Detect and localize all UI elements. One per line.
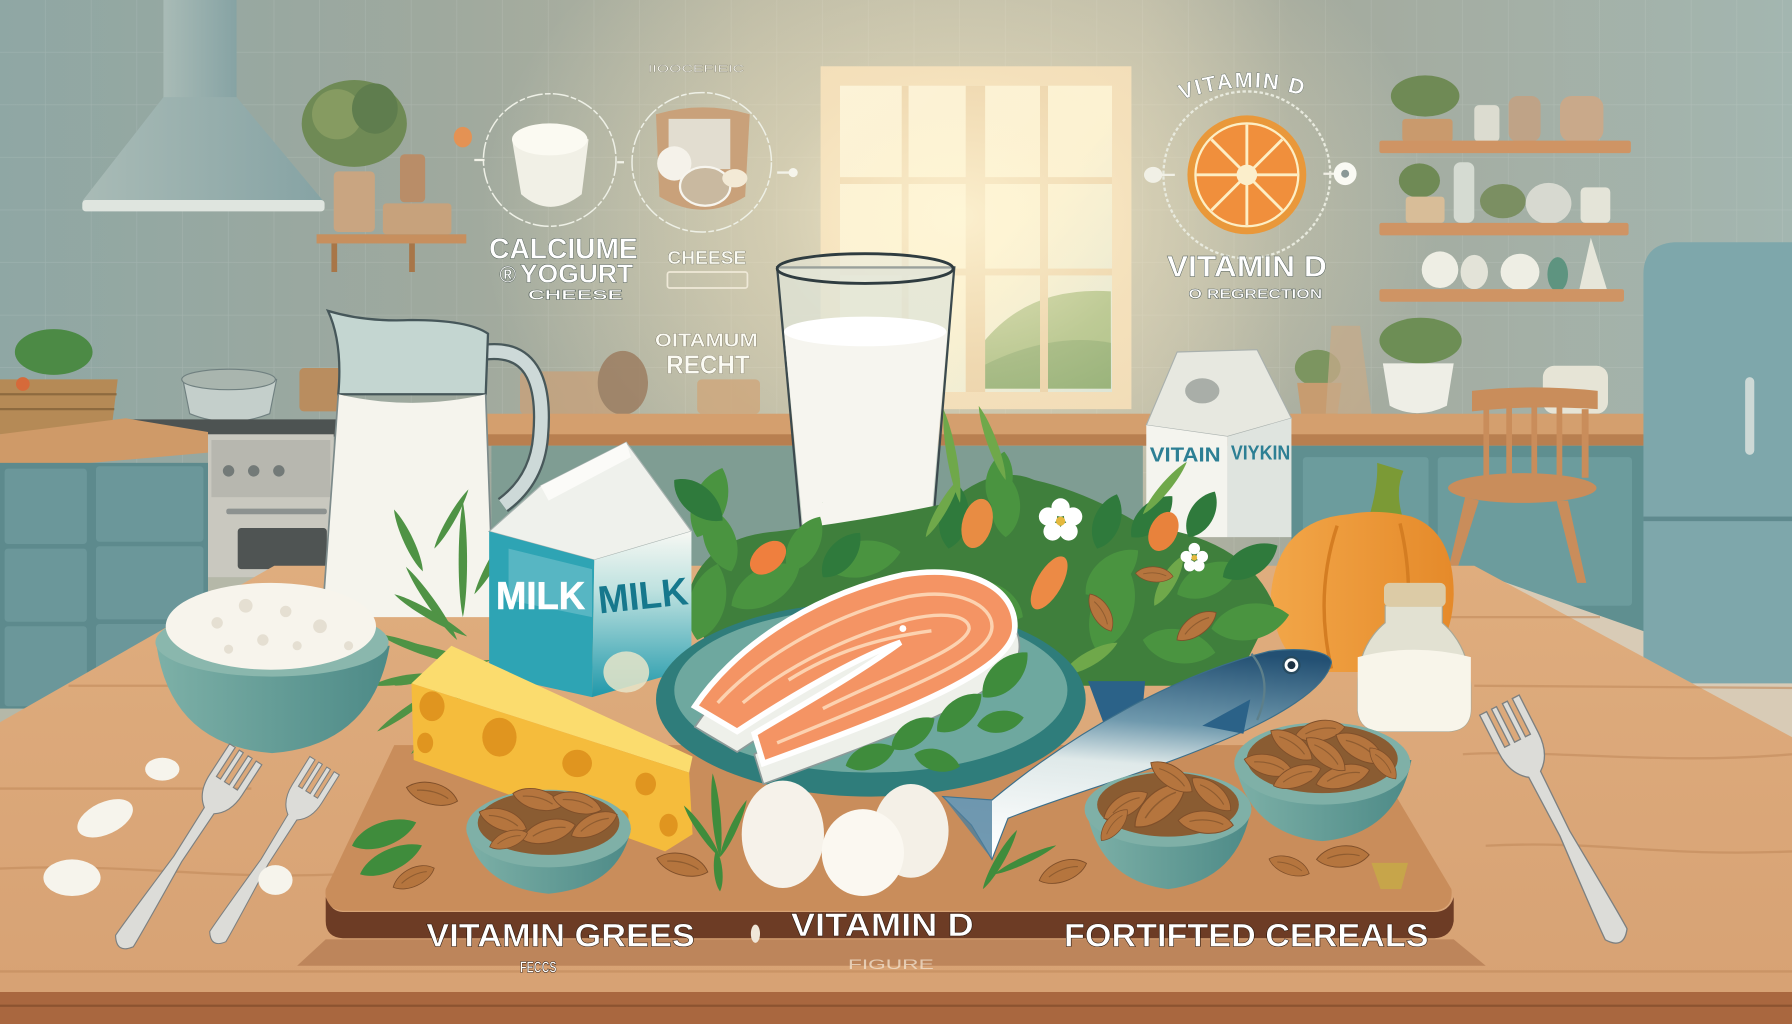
text block: curved vitamin D heading: VITAMIN D [1176, 72, 1304, 98]
plate [656, 602, 1086, 797]
left counter items: basket, pot and plant [0, 329, 345, 435]
back milk carton [1146, 350, 1291, 537]
text block: calcium yogurt: CALCIUME [489, 233, 638, 265]
text block: oitamum recht [655, 329, 758, 380]
floor right [1474, 571, 1792, 743]
kitchen background wall [0, 0, 1792, 571]
back counter clutter behind labels [520, 351, 760, 415]
wooden chair [1448, 387, 1598, 583]
text block: vitamin D label: VITAMIN D [1167, 251, 1327, 284]
icon: cheese plate in ring [632, 93, 798, 232]
scattered almonds [389, 777, 1408, 895]
salad greens [665, 404, 1292, 686]
eggs [742, 781, 949, 896]
text block: calcium yogurt [489, 233, 638, 302]
icon: yogurt in ring [454, 94, 624, 226]
herb sprigs on board [348, 773, 1058, 892]
lower cabinets centre and right [491, 446, 1657, 634]
bowl of cottage cheese [155, 583, 390, 753]
fish [943, 650, 1331, 859]
carton label MILK: MILK [496, 575, 585, 618]
oven [208, 434, 334, 577]
left almond bowl [466, 783, 631, 894]
label: vitamin greens: FECCS [520, 960, 557, 977]
text block: curved vitamin D heading [1176, 72, 1304, 98]
forks [104, 695, 1640, 958]
centre almond bowl [1085, 754, 1251, 889]
text block: calcium yogurt: YOGURT [520, 258, 633, 288]
text block: vitamin D label: O REGRECTION [1189, 286, 1322, 301]
text block: vitamin D label [1167, 251, 1327, 301]
range hood [82, 0, 325, 211]
potted plants on back counter [1295, 318, 1608, 417]
herb garnish on plate [842, 642, 1038, 777]
orange pepper [1271, 463, 1454, 672]
label: vitamin D: FIGURE [848, 957, 934, 972]
white pebbles [43, 758, 293, 896]
fridge [1643, 242, 1792, 683]
text block: oitamum recht: OITAMUM [655, 329, 758, 350]
text block: calcium yogurt: ® [499, 261, 516, 287]
tall glass of milk [777, 254, 954, 544]
sunlight glow [480, 0, 1440, 583]
text block: calcium yogurt: CHEESE [528, 287, 623, 302]
text block: cheese label: CHEESE [667, 247, 746, 268]
label: fortified cereals: FORTIFTED CEREALS [1064, 917, 1429, 953]
icon: white flower [1039, 498, 1082, 541]
back countertop [0, 414, 1678, 471]
cheese wedge [411, 646, 693, 851]
pitcher of milk [322, 311, 541, 617]
text block: cheese label [667, 247, 747, 288]
front milk carton: MILK [596, 570, 690, 622]
label: vitamin D: VITAMIN D [791, 907, 974, 943]
small milk bottle [1358, 583, 1471, 731]
cutting board [297, 745, 1486, 966]
lower cabinets left [0, 463, 208, 709]
window with hills [821, 66, 1131, 409]
right wall shelves with crockery [1379, 75, 1631, 302]
icon: orange slice with ring [1144, 91, 1357, 258]
right almond bowl [1234, 717, 1411, 841]
back carton label: VITAIN [1150, 444, 1221, 467]
label: vitamin greens [426, 917, 695, 977]
label: vitamin greens: VITAMIN GREES [426, 917, 695, 953]
front milk carton [489, 442, 691, 697]
label: vitamin D [751, 907, 974, 972]
wooden table [0, 566, 1792, 1024]
salmon steak [695, 572, 1019, 784]
back milk carton: VIYKIN [1231, 441, 1290, 464]
heading: garbled top label: IIOOCEFIEIC [648, 64, 745, 75]
left wall shelf with plant [302, 80, 466, 272]
left herb sprigs [371, 488, 528, 757]
text block: oitamum recht: RECHT [666, 350, 750, 380]
